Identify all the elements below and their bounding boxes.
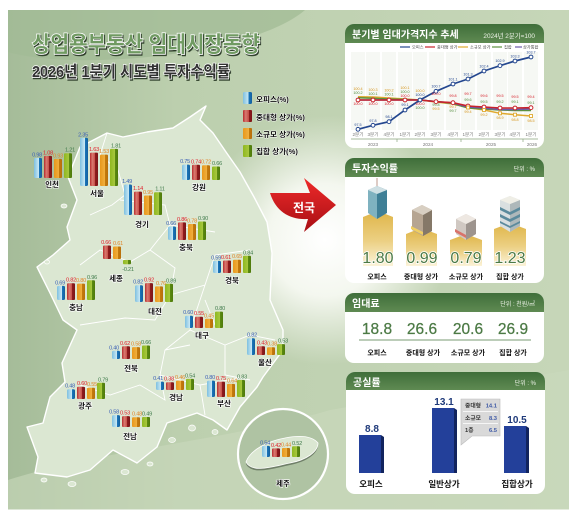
chart axis: 4분기 [383, 131, 395, 138]
Daejeon bars: 0.82 [133, 280, 143, 286]
chart legend [400, 44, 539, 50]
line chart: 100.0 [415, 89, 425, 93]
Jeju bars: 0.52 [292, 441, 302, 447]
Gwangju bars: 0.79 [98, 377, 108, 383]
Incheon bars [32, 148, 75, 189]
Gangwon bars [180, 159, 222, 192]
rent values: 20.6 [453, 321, 483, 338]
line chart [351, 44, 539, 147]
Gangwon bars: 0.72 [201, 160, 211, 166]
rent values: 18.8 [362, 321, 392, 338]
Gyeonggi bars: 1.14 [133, 186, 143, 192]
Gyeonggi bars: 1.49 [122, 179, 132, 185]
Gangwon bars: 0.66 [212, 161, 222, 167]
Busan bars: 0.64 [227, 378, 237, 384]
panel: investment return: 단위 : % [514, 165, 536, 173]
rent values: 26.9 [498, 321, 528, 338]
Chungnam bars: 0.80 [76, 278, 86, 284]
Chungbuk bars: 0.90 [198, 216, 208, 222]
rent labels [367, 348, 527, 357]
panel: vacancy rate: 공실률 [353, 376, 381, 389]
chart axis: 4분기 [447, 131, 459, 138]
Jeonnam bars [109, 410, 152, 441]
vacancy bar: general shops: 13.1 [434, 397, 454, 408]
chart axis: 2분기 [352, 131, 364, 138]
Chungnam bars: 충남 [69, 302, 83, 312]
Gyeongbuk bars [211, 250, 253, 285]
Gwangju bars [65, 377, 108, 410]
line chart: 97.5 [354, 123, 362, 127]
Daegu bars: 대구 [195, 330, 209, 340]
line chart: 99.1 [511, 100, 519, 104]
values [362, 250, 526, 267]
labels: 오피스 [367, 272, 387, 281]
labels: 중대형 상가 [404, 272, 439, 281]
Seoul bars: 1.81 [111, 143, 121, 149]
Busan bars: 0.83 [237, 374, 247, 380]
callout: general shop breakdown: 소규모 [465, 415, 482, 422]
line chart: 99.2 [480, 113, 488, 117]
Jeju inset [238, 409, 328, 499]
Chungbuk bars: 충북 [179, 242, 193, 252]
Gangwon bars: 0.75 [180, 159, 190, 165]
Jeonbuk bars [109, 340, 151, 373]
Incheon bars: 1.08 [43, 150, 53, 156]
arrow: nationwide [270, 178, 336, 232]
chart axis: 3분기 [367, 131, 379, 138]
Seoul bars: 서울 [90, 188, 104, 198]
values: 1.23 [494, 250, 526, 267]
legend: office: 오피스(%) [256, 95, 289, 104]
Gangwon bars: 강원 [192, 182, 206, 192]
line chart: 100.7 [431, 84, 441, 88]
chart axis: 4분기 [509, 131, 521, 138]
rent labels: 중대형 상가 [406, 348, 441, 357]
line chart: 99.8 [432, 103, 440, 107]
Gyeongnam bars: 0.38 [164, 377, 174, 383]
Gangwon bars: 0.74 [191, 159, 201, 165]
icon: collective shop building [500, 196, 520, 232]
Sejong bars: 세종 [109, 273, 123, 283]
chart axis: 2024 [423, 142, 434, 147]
Gwangju bars: 0.55 [87, 382, 97, 388]
line chart: 100.1 [400, 86, 410, 90]
Daegu bars: 0.55 [194, 311, 204, 317]
arrow: nationwide: 전국 [293, 201, 315, 215]
Gyeongnam bars: 0.46 [175, 375, 185, 381]
callout: general shop breakdown: 8.3 [489, 416, 498, 422]
line chart: 100.2 [384, 88, 394, 92]
chart axis: 2026 [527, 142, 538, 147]
Ulsan bars: 0.43 [257, 341, 267, 347]
rent labels: 집합 상가 [499, 348, 527, 357]
Gyeongnam bars [153, 373, 195, 402]
line chart: 97.8 [369, 119, 377, 123]
line chart: 102.4 [479, 64, 489, 68]
line chart: 99.7 [449, 109, 457, 113]
title: 상업용부동산 임대시장동향 [32, 32, 260, 57]
line chart: 100.2 [353, 91, 363, 95]
panel: vacancy rate [346, 372, 545, 494]
panel: rental price index trend: 2024년 2분기=100 [483, 31, 535, 40]
values: 0.99 [406, 250, 438, 267]
line chart: 99.8 [449, 94, 457, 98]
Daegu bars [183, 306, 225, 340]
Incheon bars: 1.21 [65, 148, 75, 154]
Ulsan bars [247, 333, 288, 367]
line chart: 101.3 [463, 72, 473, 76]
Daegu bars: 0.45 [204, 313, 214, 319]
chart legend: 상가통합 [523, 44, 539, 50]
Chungnam bars: 0.96 [87, 275, 97, 281]
Gyeongbuk bars: 경북 [225, 275, 239, 285]
Seoul bars [78, 132, 121, 198]
Jeonbuk bars: 0.40 [109, 345, 119, 351]
chart legend: 오피스 [412, 44, 424, 50]
Chungnam bars: 0.82 [66, 278, 76, 284]
Ulsan bars: 0.53 [278, 339, 288, 345]
Ulsan bars: 0.82 [247, 333, 257, 339]
Gwangju bars: 광주 [78, 400, 92, 410]
chart axis: 3분기 [494, 131, 506, 138]
vacancy bar: office: 8.8 [365, 424, 379, 435]
Jeonbuk bars: 0.58 [131, 342, 141, 348]
panel: investment return: 투자수익률 [352, 163, 398, 175]
line chart: 100.1 [384, 92, 394, 96]
line chart: 98.8 [511, 118, 519, 122]
vacancy bar: collective shops [501, 415, 533, 489]
vacancy bar: collective shops: 집합상가 [501, 479, 533, 489]
Chungbuk bars: 0.78 [187, 218, 197, 224]
subtitle: 2026년 1분기 시도별 투자수익률 [32, 63, 230, 81]
line chart: 100.3 [368, 88, 378, 92]
panel: rent: 임대료 [352, 297, 380, 310]
line chart: 99.2 [496, 100, 504, 104]
Jeonnam bars: 0.53 [120, 411, 130, 417]
panel: vacancy rate: 단위 : % [515, 379, 537, 387]
line chart: 99.6 [480, 94, 488, 98]
labels: 집합 상가 [496, 272, 524, 281]
Jeonbuk bars: 전북 [124, 363, 138, 373]
Busan bars [205, 374, 247, 408]
Daejeon bars: 0.92 [144, 278, 154, 284]
Incheon bars: 0.93 [53, 153, 63, 159]
line chart: 100.0 [415, 102, 425, 106]
icon: office tower [368, 178, 387, 219]
Gyeongbuk bars: 0.61 [221, 255, 231, 261]
pedestals [363, 211, 526, 266]
line chart: 100.0 [415, 106, 425, 110]
line chart: 99.4 [464, 110, 472, 114]
Gwangju bars: 0.60 [77, 381, 87, 387]
line chart: 98.5 [527, 119, 535, 123]
legend: small shops: 소규모 상가(%) [256, 129, 305, 139]
vacancy bar: general shops: 일반상가 [428, 479, 460, 489]
rent values [362, 321, 528, 338]
vacancy bar: general shops [428, 397, 460, 489]
panel: rent: 단위 : 천원/㎡ [500, 300, 535, 308]
line chart: 103.3 [510, 54, 520, 58]
panel: rental price index trend [345, 24, 544, 148]
callout: general shop breakdown: 중대형 [465, 402, 481, 410]
line chart: 99.1 [401, 103, 409, 107]
chart axis: 2분기 [478, 131, 490, 138]
vacancy bar: collective shops: 10.5 [507, 415, 527, 426]
Daejeon bars: 0.89 [166, 278, 176, 284]
line chart: 100.0 [384, 102, 394, 106]
map of South Korea [27, 106, 283, 486]
rent values: 26.6 [407, 321, 437, 338]
Chungnam bars: 0.69 [55, 280, 65, 286]
values: 0.79 [450, 250, 482, 267]
line chart: 100.0 [431, 92, 441, 96]
line chart: 100.0 [415, 93, 425, 97]
line chart: 100.0 [400, 94, 410, 98]
line chart: 100.4 [353, 87, 363, 91]
Seoul bars: 1.63 [89, 147, 99, 153]
line chart: 99.5 [480, 100, 488, 104]
line chart: 99.4 [527, 95, 535, 99]
Daegu bars: 0.60 [183, 310, 193, 316]
Sejong bars [101, 240, 134, 283]
line chart: 100.1 [368, 92, 378, 96]
Jeju bars [260, 440, 302, 488]
line chart: 99.6 [464, 98, 472, 102]
line chart: 99.5 [496, 94, 504, 98]
Gyeonggi bars [122, 179, 165, 229]
Busan bars: 0.75 [216, 376, 226, 382]
panel: rental price index trend: 분기별 임대가격지수 추세 [352, 28, 459, 41]
Ulsan bars: 울산 [258, 357, 272, 367]
Incheon bars: 인천 [45, 179, 59, 189]
icon: mid-size shop building [411, 205, 432, 236]
Gyeongbuk bars: 0.59 [211, 255, 221, 261]
labels: 소규모 상가 [449, 272, 484, 281]
rent labels: 소규모 상가 [451, 348, 486, 357]
Gyeongnam bars: 경남 [169, 392, 183, 402]
Jeonbuk bars: 0.62 [120, 341, 130, 347]
Daegu bars: 0.80 [215, 306, 225, 312]
chart axis: 2023 [368, 142, 379, 147]
chart axis: 2분기 [414, 131, 426, 138]
Gyeonggi bars: 0.95 [143, 190, 153, 196]
chart axis: 2025 [486, 142, 497, 147]
line chart: 99.5 [432, 107, 440, 111]
icon: small shop building [455, 214, 476, 240]
callout: general shop breakdown [461, 399, 500, 445]
Sejong bars: 0.61 [113, 241, 123, 247]
Gyeongnam bars: 0.41 [153, 376, 163, 382]
legend [243, 92, 305, 157]
Seoul bars: 2.35 [78, 132, 88, 138]
legend: collective shops: 집합 상가(%) [256, 146, 298, 156]
Jeju bars: 제주 [276, 478, 290, 488]
line chart: 98.9 [496, 116, 504, 120]
chart axis: 1분기 [399, 131, 411, 138]
Jeju bars: 0.44 [281, 442, 291, 448]
line chart: 99.7 [449, 105, 457, 109]
Jeju bars: 0.42 [271, 443, 281, 449]
Busan bars: 부산 [217, 398, 231, 408]
Incheon bars: 0.98 [32, 152, 42, 158]
Busan bars: 0.80 [205, 375, 215, 381]
chart axis: 1분기 [525, 131, 537, 138]
line chart: 99.7 [464, 92, 472, 96]
line chart: 101.1 [448, 78, 458, 82]
Gyeonggi bars: 1.11 [155, 187, 165, 193]
Daejeon bars: 0.76 [156, 281, 166, 287]
rent labels: 오피스 [367, 348, 387, 357]
chart axis: 1분기 [462, 131, 474, 138]
line chart: 100.0 [353, 102, 363, 106]
Jeonbuk bars: 0.66 [141, 340, 151, 346]
Jeonnam bars: 0.58 [109, 410, 119, 416]
Daejeon bars [133, 278, 176, 316]
Gyeonggi bars: 경기 [135, 219, 149, 229]
Sejong bars: 0.66 [101, 240, 111, 246]
line chart: 100.0 [400, 90, 410, 94]
Jeonnam bars: 0.49 [142, 412, 152, 418]
Chungbuk bars: 0.86 [177, 217, 187, 223]
Gyeongnam bars: 0.54 [185, 373, 195, 379]
callout: general shop breakdown: 6.5 [489, 428, 498, 434]
legend: mid-large shops: 중대형 상가(%) [256, 112, 305, 122]
line chart: 99.5 [511, 95, 519, 99]
labels [367, 272, 524, 281]
line chart: 102.9 [495, 59, 505, 63]
Sejong bars: -0.21 [122, 267, 134, 273]
chart axis [352, 131, 538, 147]
Chungbuk bars [166, 216, 208, 252]
Gyeongbuk bars: 0.65 [232, 254, 242, 260]
Chungnam bars [55, 275, 97, 312]
line chart: 103.7 [526, 50, 536, 54]
line chart: 99.1 [527, 101, 535, 105]
chart legend: 집합 [504, 44, 512, 50]
Gyeongbuk bars: 0.84 [243, 250, 253, 256]
callout: general shop breakdown: 14.1 [486, 404, 498, 410]
Gwangju bars: 0.48 [65, 384, 75, 390]
Jeonnam bars: 전남 [123, 431, 137, 441]
panel: rent [345, 293, 544, 363]
Ulsan bars: 0.38 [267, 342, 277, 348]
callout: general shop breakdown: 1층 [465, 426, 474, 434]
panel: investment return [345, 158, 544, 283]
line chart: 100.0 [368, 102, 378, 106]
Seoul bars: 1.53 [99, 149, 109, 155]
line chart: 98.1 [385, 115, 393, 119]
chart axis: 3분기 [430, 131, 442, 138]
vacancy bar: office: 오피스 [359, 479, 383, 489]
Jeonnam bars: 0.48 [132, 412, 142, 418]
Daejeon bars: 대전 [148, 306, 162, 316]
Chungbuk bars: 0.66 [166, 221, 176, 227]
Jeju bars: 0.54 [260, 440, 270, 446]
values: 1.80 [362, 250, 394, 267]
title [32, 32, 260, 81]
chart legend: 소규모 상가 [470, 44, 491, 50]
chart legend: 중대형 상가 [437, 44, 458, 50]
vacancy bar: office [359, 424, 384, 489]
